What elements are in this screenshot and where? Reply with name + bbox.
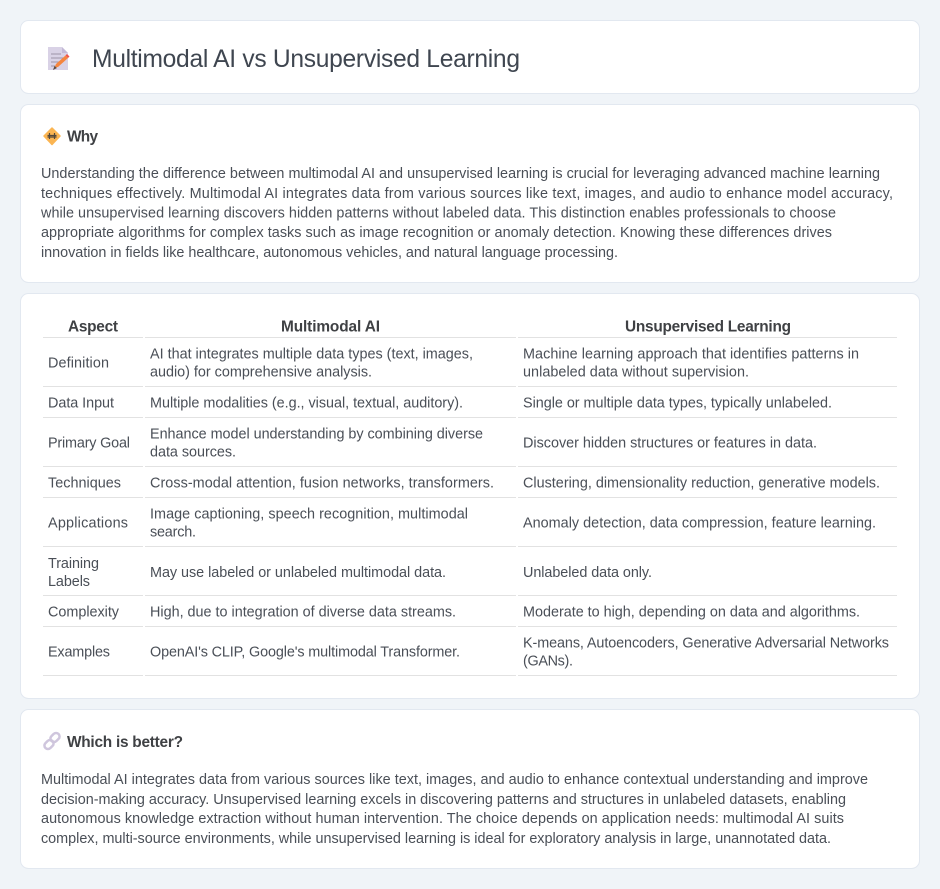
heading: why: Why xyxy=(67,128,98,146)
row: complexity: Moderate to high, depending on data and algorithms. xyxy=(523,604,860,620)
text block: which is better paragraph: complex, multi-source environments, while unsupervised learning is ideal for exploratory analysis in large, unannotated data. xyxy=(41,831,831,847)
row: definition: audio) for comprehensive analysis. xyxy=(150,364,372,380)
row: applications: Anomaly detection, data compression, feature learning. xyxy=(523,516,876,532)
row: training labels: Training xyxy=(48,556,99,572)
text block: why paragraph: appropriate algorithms for complex tasks such as image recognition or anomaly detection. Knowing these differences drives xyxy=(41,225,832,241)
row: techniques: Techniques xyxy=(48,476,121,492)
row: applications: search. xyxy=(150,524,196,540)
text block: which is better paragraph: decision-making accuracy. Unsupervised learning excels in discovering patterns and structures in unlabeled datasets, enabling xyxy=(41,792,846,808)
row: primary goal: Primary Goal xyxy=(48,436,130,452)
row: definition: AI that integrates multiple data types (text, images, xyxy=(150,346,473,362)
table header: Unsupervised Learning xyxy=(625,318,791,336)
row: primary goal: data sources. xyxy=(150,444,236,460)
table header xyxy=(68,318,791,336)
panel: why xyxy=(20,104,920,282)
title: Multimodal AI vs Unsupervised Learning xyxy=(92,46,520,73)
row: training labels xyxy=(48,556,652,590)
text block: why paragraph xyxy=(40,166,893,261)
row: complexity xyxy=(48,604,860,620)
icon: warning diamond xyxy=(44,128,60,144)
row: data input: Single or multiple data types, typically unlabeled. xyxy=(523,396,832,412)
row: examples: (GANs). xyxy=(523,654,573,670)
row: examples: K-means, Autoencoders, Generative Adversarial Networks xyxy=(523,636,889,652)
text block: which is better paragraph: autonomous knowledge extraction without human intervention. The choice depends on application needs: multimodal AI suits xyxy=(41,811,844,827)
table header: Multimodal AI xyxy=(281,318,380,336)
text block: which is better paragraph: Multimodal AI integrates data from various sources like text, images, and audio to enhance contextual understanding and improve xyxy=(41,772,868,788)
table header: Aspect xyxy=(68,318,118,336)
icon: link xyxy=(43,731,61,751)
row: definition xyxy=(48,346,859,380)
text block: why paragraph: innovation in fields like healthcare, autonomous vehicles, and natural language processing. xyxy=(41,245,618,261)
row: examples: Examples xyxy=(48,644,110,660)
row: primary goal: Enhance model understanding by combining diverse xyxy=(150,426,483,442)
row: training labels: Unlabeled data only. xyxy=(523,565,652,581)
row: techniques xyxy=(48,476,880,492)
row: complexity: High, due to integration of diverse data streams. xyxy=(150,604,456,620)
row: primary goal xyxy=(48,426,817,460)
row: training labels: Labels xyxy=(48,574,90,590)
text block: which is better paragraph xyxy=(41,772,868,847)
panel: which is better xyxy=(20,710,920,868)
row: definition: Definition xyxy=(48,356,109,372)
row: applications xyxy=(48,506,876,540)
icon: document with pencil xyxy=(48,47,70,70)
text block: why paragraph: while unsupervised learning discovers hidden patterns without labeled data. This distinction enables professionals to choose xyxy=(40,206,836,222)
panel: title card xyxy=(20,20,920,94)
row: applications: Applications xyxy=(48,516,128,532)
row: examples: OpenAI's CLIP, Google's multimodal Transformer. xyxy=(150,644,460,660)
row: data input: Multiple modalities (e.g., visual, textual, auditory). xyxy=(150,396,463,412)
text block: why paragraph: techniques effectively. Multimodal AI integrates data from various sources like text, images, and audio to enhance model accuracy, xyxy=(41,186,893,202)
row: data input xyxy=(48,396,832,412)
row: examples xyxy=(48,636,889,670)
row: primary goal: Discover hidden structures or features in data. xyxy=(523,436,817,452)
row: techniques: Clustering, dimensionality reduction, generative models. xyxy=(523,476,880,492)
row: definition: Machine learning approach that identifies patterns in xyxy=(523,346,859,362)
row: complexity: Complexity xyxy=(48,604,120,620)
row: definition: unlabeled data without supervision. xyxy=(523,364,749,380)
row: training labels: May use labeled or unlabeled multimodal data. xyxy=(150,565,446,581)
panel: comparison table xyxy=(20,294,920,698)
row: data input: Data Input xyxy=(48,396,114,412)
row: applications: Image captioning, speech recognition, multimodal xyxy=(150,506,468,522)
text block: why paragraph: Understanding the difference between multimodal AI and unsupervised learning is crucial for leveraging advanced machine learning xyxy=(41,166,880,182)
row: techniques: Cross-modal attention, fusion networks, transformers. xyxy=(150,476,494,492)
heading: which is better: Which is better? xyxy=(67,734,183,751)
